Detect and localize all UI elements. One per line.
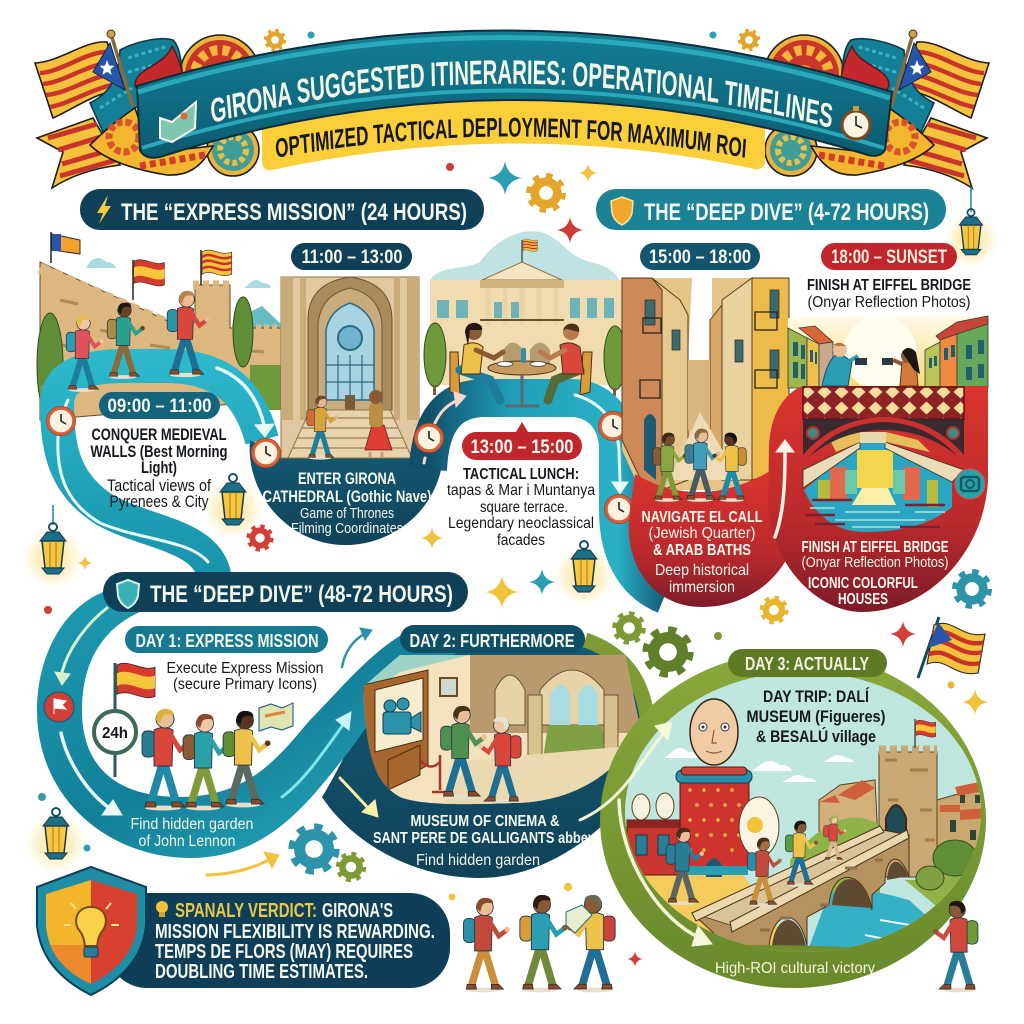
text block: day 1	[166, 660, 324, 693]
text block: john lennon: of John Lennon	[138, 833, 236, 850]
heading: deep dive 48-72	[103, 572, 468, 612]
scene: el call street	[622, 278, 789, 495]
flag: red	[133, 260, 164, 300]
text block: lunch: square terrace.	[480, 499, 568, 516]
text block: finish at bridge top: (Onyar Reflection Photos)	[808, 294, 970, 311]
icon: map held by reader	[566, 905, 592, 933]
time pill 15:00	[640, 243, 760, 270]
text block: el call: Deep historical	[655, 562, 749, 579]
text block: el call: immersion	[669, 579, 735, 596]
flag badge	[44, 692, 74, 722]
icon: film camera poster	[383, 698, 421, 734]
walkers on the wall	[66, 291, 210, 392]
route arrows day 1	[55, 608, 378, 875]
text block: cathedral	[262, 469, 432, 537]
day 3 arrows	[580, 722, 712, 946]
text block: day 2: SANT PERE DE GALLIGANTS abbey	[373, 830, 595, 847]
gears lower	[292, 614, 988, 967]
text block: day 1: (secure Primary Icons)	[173, 676, 317, 693]
text block: day 3: & BESALÚ village	[756, 727, 876, 746]
subtitle ribbon	[262, 101, 765, 170]
icon: day 1 map	[259, 703, 293, 731]
dali building	[627, 820, 682, 875]
text block: conquer walls: CONQUER MEDIEVAL	[92, 426, 226, 444]
time pill 18:00: 18:00 – SUNSET	[831, 247, 947, 268]
text block: lunch: TACTICAL LUNCH:	[463, 466, 579, 483]
text block: john lennon	[130, 816, 254, 850]
text block: lunch: facades	[497, 532, 545, 549]
text block: conquer walls: Light)	[141, 459, 177, 477]
photographer woman	[882, 348, 920, 386]
heading: deep dive 48-72: THE “DEEP DIVE” (48-72 HOURS)	[150, 581, 453, 608]
text block: finish at bridge top: FINISH AT EIFFEL BRIDGE	[807, 277, 971, 294]
panel: verdict: MISSION FLEXIBILITY IS REWARDING.	[155, 921, 435, 943]
text block: conquer walls: Pyrenees & City	[110, 493, 209, 511]
scene: museum and abbey	[363, 655, 638, 804]
time pill 18:00	[821, 243, 957, 270]
text block: lunch: tapas & Mar i Muntanya	[447, 482, 595, 499]
right houses	[938, 788, 981, 880]
left houses	[788, 316, 988, 388]
caption: high roi: High-ROI cultural victory	[715, 960, 875, 977]
time pill 15:00: 15:00 – 18:00	[649, 247, 751, 268]
title banner: GIRONA SUGGESTED ITINERARIES: OPERATIONAL TIMELINES	[211, 60, 832, 127]
header ornaments left	[35, 30, 314, 188]
time pill 11:00	[291, 243, 412, 270]
stone bridge	[692, 830, 909, 950]
text block: lunch	[447, 466, 595, 549]
photographer man	[822, 343, 867, 386]
icon: small bulb	[156, 901, 168, 917]
time pill 09:00: 09:00 – 11:00	[108, 396, 212, 417]
day 3 pill	[728, 649, 887, 677]
text block: cathedral: Game of Thrones	[300, 505, 394, 522]
text block: day 3: DAY TRIP: DALÍ	[763, 687, 870, 706]
text block: finish at bridge lower: FINISH AT EIFFEL BRIDGE	[802, 539, 948, 556]
text block: finish at bridge lower: (Onyar Reflection Photos)	[802, 555, 948, 571]
time pill 11:00: 11:00 – 13:00	[302, 247, 402, 268]
scene: neoclassical square	[424, 231, 626, 396]
flag: striped	[201, 250, 232, 285]
text block: day 2: MUSEUM OF CINEMA &	[410, 813, 560, 830]
text block: el call: NAVIGATE EL CALL	[642, 509, 763, 526]
text block: day 2: Find hidden garden	[416, 852, 540, 869]
white glow arrows morning	[58, 368, 274, 562]
heading: deep dive top	[596, 189, 946, 230]
subtitle ribbon: OPTIMIZED TACTICAL DEPLOYMENT FOR MAXIMUM ROI	[276, 118, 746, 158]
text block: conquer walls	[90, 426, 228, 511]
scene: red bridge and river	[803, 387, 985, 532]
day 1 walkers	[142, 709, 271, 810]
scene: sunset houses	[788, 316, 988, 390]
guide and bridge walkers	[666, 828, 704, 905]
icon: shield with bulb	[37, 867, 146, 995]
day 1 pill	[125, 626, 328, 653]
panel: verdict	[107, 893, 450, 988]
text block: day 2	[373, 813, 595, 869]
lantern: top right	[944, 187, 998, 267]
panel: day 2 blob	[322, 640, 655, 878]
panel: bridge red blob	[768, 386, 988, 612]
panel: el call red blob	[629, 470, 799, 607]
day 2 pill: DAY 2: FURTHERMORE	[410, 631, 574, 651]
catalan flag day 3	[918, 617, 986, 678]
dali head	[690, 699, 738, 765]
heading: deep dive top: THE “DEEP DIVE” (4-72 HOURS)	[644, 199, 929, 226]
river water	[804, 443, 952, 532]
title banner	[136, 30, 893, 159]
text block: day 3: MUSEUM (Figueres)	[746, 707, 886, 726]
person in red skirt	[365, 390, 392, 458]
arrows: afternoon	[424, 392, 628, 494]
text block: conquer walls: WALLS (Best Morning	[90, 443, 228, 461]
text block: el call	[642, 509, 763, 596]
text block: day 3	[746, 687, 886, 746]
arrow: red blob up	[775, 440, 794, 537]
lanterns and sparkles middle	[23, 474, 989, 873]
text block: finish at bridge lower: HOUSES	[838, 591, 888, 608]
text block: el call: (Jewish Quarter)	[648, 525, 756, 542]
teal route: morning	[57, 366, 262, 585]
text block: finish at bridge top	[807, 277, 971, 311]
icon: stopwatch	[842, 106, 870, 139]
day 1 pill: DAY 1: EXPRESS MISSION	[136, 631, 318, 651]
panel: cathedral blob	[250, 440, 443, 545]
icon: camera badge	[955, 469, 985, 499]
heading: express mission: THE “EXPRESS MISSION” (24 HOURS)	[121, 199, 467, 226]
day 2 pill	[400, 625, 585, 653]
text block: cathedral: Filming Coordinates	[291, 520, 403, 537]
time pill 13:00: 13:00 – 15:00	[470, 437, 574, 458]
tower	[879, 750, 937, 877]
flag and 24h sign: 24h	[102, 725, 128, 742]
S curve band: deep dive route	[37, 592, 470, 858]
text block: finish at bridge lower	[802, 539, 948, 608]
icon: map	[160, 102, 196, 142]
scene: medieval walls	[37, 232, 282, 420]
text block: cathedral: CATHEDRAL (Gothic Nave)	[262, 487, 432, 506]
heading: express mission	[80, 189, 484, 230]
teal route: afternoon	[428, 398, 665, 595]
header ornaments right	[710, 30, 989, 188]
panel: day 3 circle	[600, 652, 990, 1000]
text block: cathedral: ENTER GIRONA	[298, 469, 396, 488]
text block: finish at bridge lower: ICONIC COLORFUL	[808, 575, 918, 592]
diner woman	[450, 323, 503, 400]
flag: blue	[51, 232, 80, 263]
panel: verdict: TEMPS DE FLORS (MAY) REQUIRES	[155, 941, 413, 963]
text block: lunch: Legendary neoclassical	[448, 515, 594, 532]
text block: john lennon: Find hidden garden	[130, 816, 254, 833]
text block: day 1: Execute Express Mission	[166, 660, 324, 677]
clocks	[46, 406, 634, 524]
lunch table and diners	[450, 323, 592, 406]
flag day 3	[915, 719, 936, 748]
diner man	[540, 324, 592, 400]
decorative sparkles top	[446, 161, 597, 243]
panel: verdict: GIRONA'S	[322, 900, 393, 922]
day 3 pill: DAY 3: ACTUALLY	[745, 654, 869, 674]
bottom walkers	[463, 895, 978, 992]
el call walkers	[653, 429, 746, 502]
scene: cathedral	[281, 277, 419, 460]
panel: verdict: DOUBLING TIME ESTIMATES.	[155, 961, 368, 983]
panel: verdict: SPANALY VERDICT:	[175, 900, 317, 922]
village	[818, 779, 878, 832]
river	[810, 892, 924, 951]
text block: conquer walls: Tactical views of	[107, 477, 211, 495]
text block: el call: & ARAB BATHS	[653, 542, 751, 559]
flag and 24h sign	[94, 663, 155, 777]
time pill 13:00	[462, 422, 582, 460]
